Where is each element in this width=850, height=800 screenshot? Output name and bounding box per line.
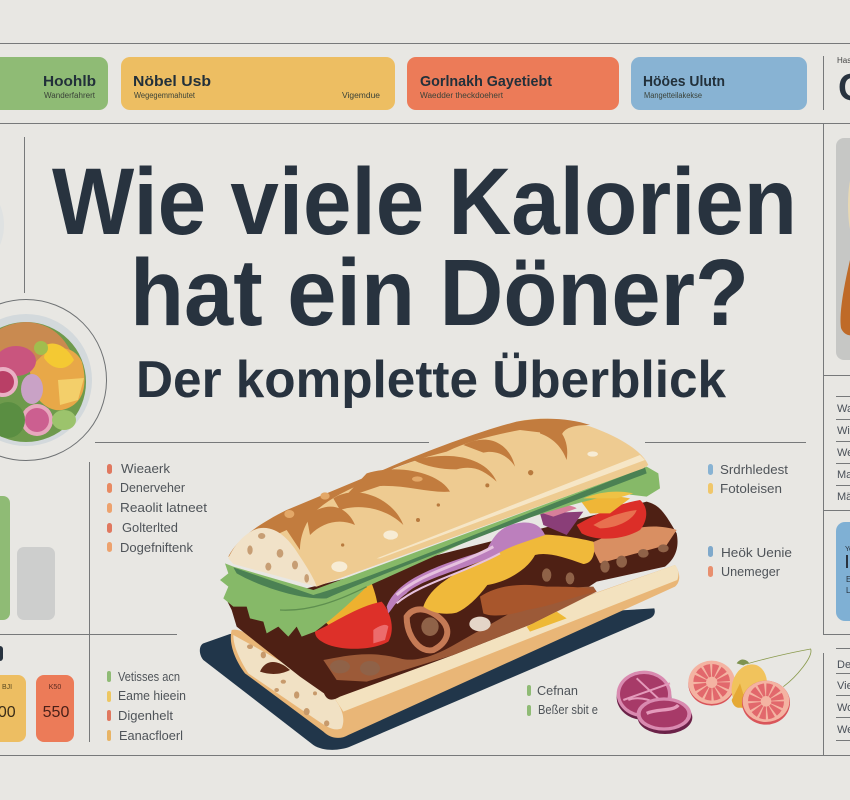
illustration: grapefruit slice (742, 681, 790, 725)
bottom bun (231, 565, 679, 738)
cheese (423, 535, 594, 614)
category pill: green (0, 57, 108, 110)
legend: right upper (708, 463, 789, 496)
legend: right lower: Unemeger (721, 565, 780, 579)
category pill: blue (631, 57, 807, 110)
category pill: green: Hoohlb (43, 73, 96, 90)
category pill: red (407, 57, 619, 110)
category pill: yellow: Vigemdue (342, 91, 381, 100)
legend: right upper: Fotoleisen (720, 482, 782, 496)
category pill: yellow: Wegegemmahutet (134, 91, 196, 100)
category pill: yellow (121, 57, 395, 110)
legend: right lower (708, 546, 792, 579)
tomato slices (315, 496, 646, 649)
info table bottom right (837, 659, 850, 736)
lettuce (220, 467, 660, 637)
category pill: blue: Mangetteilakekse (644, 91, 703, 100)
info table right (837, 403, 850, 503)
legend: left upper (107, 462, 208, 555)
legend: centre bottom: Beßer sbit e (538, 703, 598, 717)
red onion (387, 506, 583, 613)
legend: left upper: Denerveher (120, 481, 185, 495)
category pill: blue: Hööes Ulutn (643, 73, 725, 90)
legend: left lower (107, 670, 186, 743)
salad bowl (0, 300, 106, 460)
legend: left upper: Golterlted (122, 521, 178, 535)
legend: centre bottom (527, 684, 598, 717)
legend: right lower: Heök Uenie (721, 546, 792, 560)
legend: right upper: Srdrhledest (720, 463, 789, 477)
value card: red: K50 (49, 684, 61, 691)
illustration: red onion slices (617, 649, 811, 734)
top bun (228, 419, 648, 587)
title: Wie viele Kalorien (52, 149, 797, 255)
blue info card (836, 522, 850, 621)
legend: centre bottom: Cefnan (537, 684, 578, 698)
legend: left lower: Vetisses acn (118, 670, 180, 684)
illustration: lemon with stem (727, 649, 811, 713)
cropped food photo right (836, 138, 850, 360)
category pill: green: Wanderfahrert (44, 91, 96, 100)
legend: left lower: Eame hieein (118, 689, 186, 703)
legend: left upper: Dogefniftenk (120, 541, 194, 555)
legend: left lower: Digenhelt (118, 709, 174, 723)
value card: red (36, 675, 74, 742)
subtitle: Der komplette Überblick (136, 351, 726, 409)
title (52, 149, 797, 409)
category pill: red: Waedder theckdoehert (420, 91, 504, 100)
category pill: yellow: Nöbel Usb (133, 73, 211, 90)
board shadow (200, 608, 655, 750)
cropped heading stub (0, 646, 3, 661)
value card: red: 550 (43, 704, 69, 721)
category pill: red: Gorlnakh Gayetiebt (420, 73, 552, 90)
illustration: doner sandwich (200, 419, 679, 750)
value card: yellow: BJI (2, 684, 12, 691)
legend: left upper: Wieaerk (121, 462, 171, 476)
illustration: grapefruit (688, 661, 735, 706)
cropped circle left (0, 187, 4, 263)
bar chart (0, 496, 55, 620)
legend: left lower: Eanacfloerl (119, 729, 183, 743)
legend: left upper: Reaolit latneet (120, 501, 208, 515)
value card: yellow (0, 675, 26, 742)
title: hat ein Döner? (130, 240, 749, 346)
meat filling (227, 502, 678, 700)
